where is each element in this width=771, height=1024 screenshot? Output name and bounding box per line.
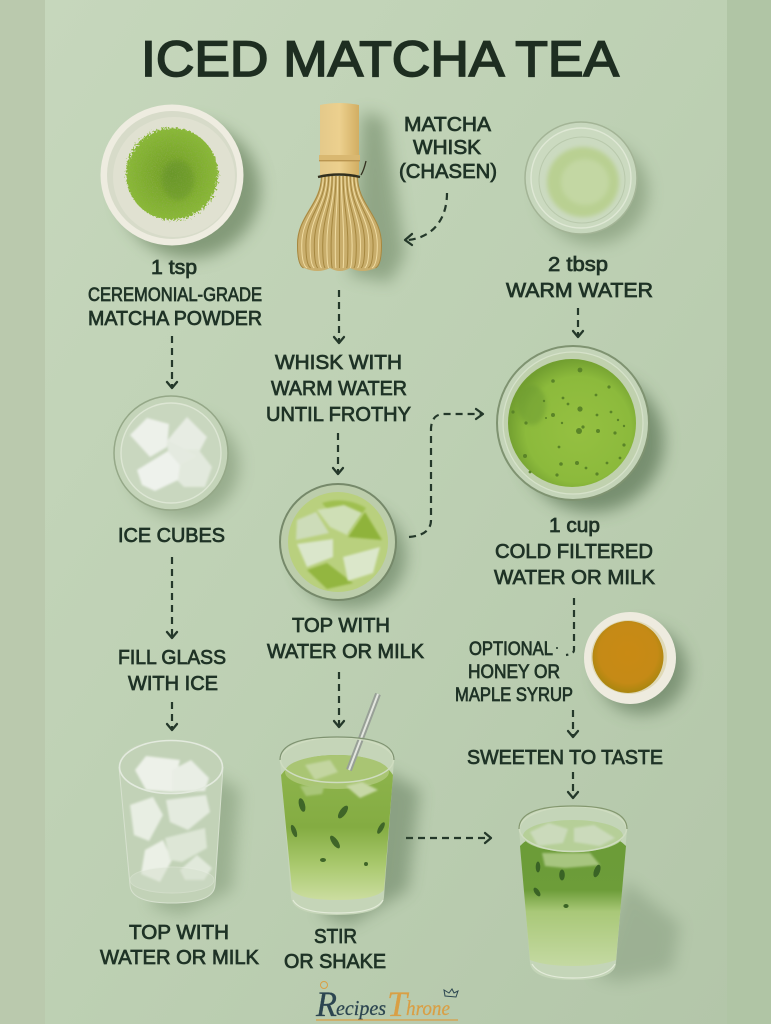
arrow: whisk downward xyxy=(334,290,344,343)
label: top with water or milk, bottom: TOP WITH xyxy=(129,922,229,944)
label: fill glass with ice: WITH ICE xyxy=(128,673,218,695)
label: whisk step: WHISK WITH xyxy=(275,352,402,374)
icon: tall glass with ice xyxy=(119,740,240,915)
label: warm water: 2 tbsp xyxy=(548,254,608,276)
label: top with water or milk, middle: TOP WITH xyxy=(292,615,390,637)
label: fill glass with ice xyxy=(118,647,226,695)
label: cold water or milk: 1 cup xyxy=(549,515,600,537)
arrow: glass to matcha bowl xyxy=(409,409,483,537)
label: matcha whisk: (CHASEN) xyxy=(399,161,497,183)
arrow: optional to sweeten xyxy=(568,710,578,737)
label: top with water or milk, bottom xyxy=(100,922,260,969)
icon: matcha in glass bowl xyxy=(497,346,664,512)
label: matcha whisk: MATCHA xyxy=(404,114,492,136)
label: stir or shake: STIR xyxy=(314,926,357,948)
label: cold water or milk: COLD FILTERED xyxy=(495,541,653,563)
label: ceremonial matcha: MATCHA POWDER xyxy=(88,308,262,330)
label: matcha whisk xyxy=(399,114,497,183)
logo: T xyxy=(387,984,410,1024)
icon: warm water bowl xyxy=(525,122,648,244)
label: optional sweetener: MAPLE SYRUP xyxy=(455,685,573,706)
icon: ice cubes in glass bowl xyxy=(114,396,239,518)
arrow: ice cubes to fill glass xyxy=(167,557,177,638)
label: whisk step: UNTIL FROTHY xyxy=(266,404,411,426)
label: ceremonial matcha xyxy=(88,257,262,330)
icon: glass with ice and matcha, top view xyxy=(280,484,406,608)
arrow: mixed glass to final glass xyxy=(406,833,491,843)
label: optional sweetener xyxy=(455,639,573,706)
icon: matcha powder bowl xyxy=(100,104,260,258)
title: ICED MATCHA TEA xyxy=(141,31,620,87)
arrow: top with water to mixed glass xyxy=(334,672,344,727)
label: top with water or milk, middle xyxy=(267,615,425,663)
label: whisk step: WARM WATER xyxy=(271,378,407,400)
icon: honey dish xyxy=(584,612,687,714)
label: top with water or milk, bottom: WATER OR MILK xyxy=(100,947,260,969)
arrow: sweeten to final glass xyxy=(568,772,578,798)
label: optional sweetener: OPTIONAL xyxy=(469,639,553,660)
label: whisk step xyxy=(266,352,411,426)
label: stir or shake: OR SHAKE xyxy=(284,951,386,973)
logo xyxy=(315,982,458,1024)
label: matcha whisk: WHISK xyxy=(413,137,482,159)
arrow: warm water to matcha xyxy=(573,308,583,337)
icon: final iced matcha glass xyxy=(519,806,680,982)
arrow: cold water to optional xyxy=(566,598,574,655)
label: optional sweetener: HONEY OR xyxy=(468,662,560,683)
label: ceremonial matcha: 1 tsp xyxy=(151,257,197,279)
logo: R xyxy=(315,984,337,1024)
label: warm water xyxy=(506,254,653,302)
label: sweeten to taste: SWEETEN TO TASTE xyxy=(467,747,663,769)
label: ceremonial matcha: CEREMONIAL-GRADE xyxy=(88,285,262,306)
label: cold water or milk: WATER OR MILK xyxy=(494,567,656,589)
label: stir or shake xyxy=(284,926,386,973)
label: top with water or milk, middle: WATER OR MILK xyxy=(267,641,425,663)
icon: mixed matcha glass with straw xyxy=(280,694,420,925)
logo: hrone xyxy=(406,996,450,1020)
arrow: whisk text to glass xyxy=(333,433,343,474)
icon: matcha whisk xyxy=(297,103,405,282)
label: cold water or milk xyxy=(494,515,656,589)
logo: ecipes xyxy=(336,996,386,1020)
label: fill glass with ice: FILL GLASS xyxy=(118,647,226,669)
label: warm water: WARM WATER xyxy=(506,280,653,302)
label: ice cubes: ICE CUBES xyxy=(118,525,225,547)
arrow: fill glass to tall glass xyxy=(167,702,177,730)
arrow: whisk label to whisk xyxy=(405,193,447,245)
arrow: powder to ice cubes xyxy=(167,336,177,388)
